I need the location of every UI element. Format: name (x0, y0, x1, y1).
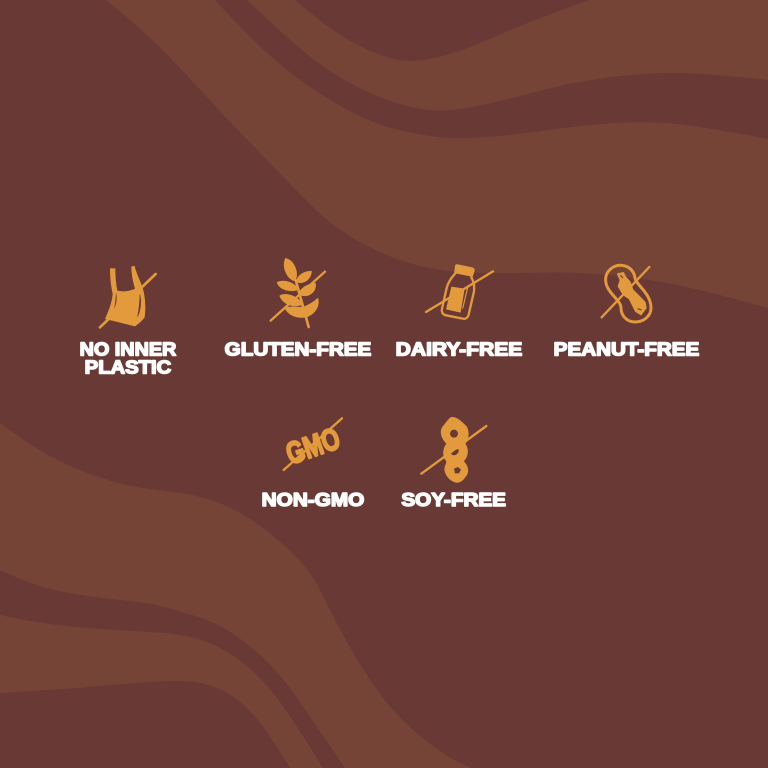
label: no inner plastic: PLASTIC (85, 356, 171, 378)
item: no inner plastic (80, 266, 176, 378)
label: peanut-free: PEANUT-FREE (554, 338, 699, 360)
icon: crossed-out soybean pod (421, 418, 486, 482)
row 2 of attributes (262, 418, 506, 510)
item: non-gmo (262, 418, 364, 510)
item: dairy-free (396, 265, 522, 360)
item: peanut-free (554, 265, 699, 360)
label: no inner plastic: NO INNER (80, 338, 176, 360)
row 1 of attributes (80, 259, 699, 378)
label: soy-free: SOY-FREE (401, 489, 506, 510)
icon: crossed-out milk bottle (426, 265, 493, 319)
label: gluten-free: GLUTEN-FREE (225, 338, 371, 360)
item: gluten-free (225, 259, 371, 360)
label: no inner plastic (80, 338, 176, 378)
icon: crossed-out plastic bag (100, 266, 156, 327)
label: dairy-free: DAIRY-FREE (396, 338, 522, 360)
label: non-gmo: NON-GMO (262, 489, 364, 510)
background: top wave bands (106, 0, 768, 308)
icon: crossed-out GMO: GMO (282, 421, 344, 471)
icon: crossed-out wheat (271, 259, 325, 327)
icon: crossed-out peanut (602, 265, 651, 322)
background: bottom wave bands (0, 423, 472, 768)
item: soy-free (401, 418, 506, 510)
